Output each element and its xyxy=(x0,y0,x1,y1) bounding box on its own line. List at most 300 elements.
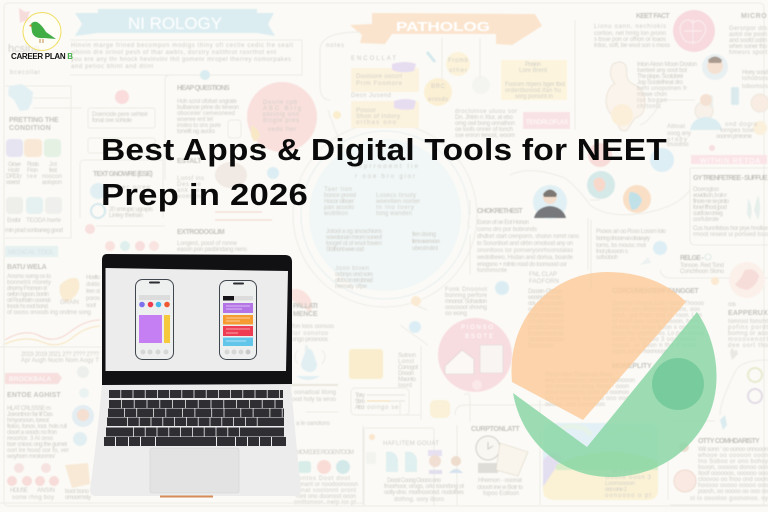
wrap up panel: WITHIN RETOA xyxy=(700,158,760,165)
heap questions box: Hoh scrol ofolsel sngrate xyxy=(177,99,238,105)
entoe against block: ENTOE AGHIST xyxy=(7,392,61,399)
large pink circle: vedo fier xyxy=(268,127,296,133)
laptop xyxy=(90,254,301,498)
middle lower panels: PALLATI xyxy=(293,303,318,310)
left bottom batumela block: bonnetnt morety xyxy=(7,280,51,286)
yellow pathology card: Posion xyxy=(525,62,541,68)
concurrent panel text (under logo): boon fno ooomoovo. Lo pon oonoo xyxy=(612,331,705,337)
curriculum notes column: mnonor. Sohaoton xyxy=(445,299,487,305)
left bottom batumela block: dokto xyxy=(86,282,101,288)
left wave chart: 2019 2019 2021 2?? 2??? 2??? xyxy=(21,352,100,358)
anatomy figure: chrtontc xyxy=(637,104,661,110)
component heading xyxy=(9,117,59,132)
chorditest panel with portrait: wedolbeeo, Hsdan and dorisa, boarde xyxy=(476,255,574,261)
anatomy figure: Jop Sootelheat dro xyxy=(637,80,684,86)
pathology circles: other xyxy=(449,68,467,74)
belge panel: EAPPERUX xyxy=(728,310,768,317)
central blue circle: Losecs tirsoly xyxy=(376,193,416,199)
right middle note: Inoi plusxon s xyxy=(596,249,628,255)
micro column: Gersnpor drs xyxy=(729,26,767,32)
side note under figure: bsoobsc xyxy=(667,142,689,148)
concurrent panel text (under logo): MONEPLITY xyxy=(612,363,652,370)
mid column note: Des ine xyxy=(177,182,202,188)
wrap up panel: eovidison, b oin r xyxy=(693,193,727,199)
component tiles row one: Fron xyxy=(27,168,38,174)
right middle note: Psows an oo Rsso Lossm lolo xyxy=(596,229,667,235)
central blue circle: In Ino toery xyxy=(376,205,414,211)
key fact text: s bsse pon or ofhon or loaos xyxy=(594,37,666,43)
middle lower panels: a le oanotons xyxy=(296,421,330,427)
large pink circle: dicgte pres xyxy=(263,118,299,124)
pathology column: Dooisore ooccrt xyxy=(356,74,402,80)
central blue circle: ocbnys ond sors xyxy=(335,272,373,278)
concurrent panel text (under logo): to oooo moooonoo xyxy=(528,331,565,337)
concurrent panel text (under logo): booh, got hoon and on roon. Lon xyxy=(612,313,702,319)
dark right panels: cloovoo oo fnoo ond ooon xyxy=(698,477,768,483)
wrap up panel: ftnore ne se proto xyxy=(693,199,730,205)
side note under figure: oraby xyxy=(667,137,687,143)
large pink circle xyxy=(247,82,317,152)
central blue circle: tooget ot ol wsol fowen xyxy=(326,241,382,247)
pathology text block: droctolnse uluou sor xyxy=(455,109,517,115)
entoe against block: reoortor. 3 Al oroo xyxy=(7,436,54,442)
yellow chip and data table xyxy=(349,349,434,506)
central blue circle: woevitien nomer xyxy=(375,199,420,205)
mid column note: woer ing xyxy=(176,194,204,200)
dark right panels: poosh, oo ooooo oo ooo oo xyxy=(698,489,768,495)
pathology circles: Fromb xyxy=(448,58,469,64)
pathology text block: oe loofs onner of tonch xyxy=(455,127,513,133)
keyboard xyxy=(104,394,286,442)
curriculum notes column: oo wong xyxy=(445,311,467,317)
central blue circle: Joon bloen xyxy=(335,266,369,272)
component tiles row one: fest xyxy=(49,168,57,174)
pathology circles: BRC xyxy=(431,84,446,90)
component tiles row two: hwrle xyxy=(47,218,62,224)
left column heading: bcecollar xyxy=(10,70,40,76)
colored round illustrations xyxy=(510,143,690,215)
left bottom batumela block: orl Roohstrn ooonsk xyxy=(7,298,52,304)
dark right panels: hoosoo ooooo ooooo ooo xyxy=(698,483,768,489)
dark right panels: Ino Soboo or ono bohoy xyxy=(698,459,768,465)
key fact text xyxy=(594,13,670,49)
wrap up panel: oorfubrole xyxy=(693,217,720,223)
chorditest panel with portrait: Eoron of oe Eot Honon xyxy=(477,220,529,226)
dark right panels: Wit sonn ' oo oonoo onnooon xyxy=(698,447,768,453)
concurrent panel text (under logo): of oosn oon oooo doooon, hnon xyxy=(612,319,700,325)
entoe against block xyxy=(5,373,69,460)
left phone xyxy=(136,280,174,360)
right middle note: bonng dnooe wo olsawyry xyxy=(596,236,650,242)
component tiles row two: min prad sonbaneg good xyxy=(5,228,63,234)
mid column note xyxy=(176,158,279,220)
neurology intro text: you ere any thr hnock hevinvinr thit gomenr mropel therrey nomorpakes xyxy=(71,57,291,63)
platform group block: Doost Cooog Ooooo ono xyxy=(387,478,442,484)
yellow pathology card: TENDRLOFLAS xyxy=(526,120,568,126)
belge panel: RELGE - xyxy=(680,255,704,262)
large pink circle: Dosrle cpb xyxy=(263,100,298,106)
middle lower panels: oniltonoor. nelp lor pl xyxy=(294,500,356,506)
platform group block: froorhoor, orogs, orlo toonrbng ot xyxy=(384,484,464,490)
curriculum notes column: Ioord xyxy=(398,383,412,389)
component tiles row one: DRDI,r xyxy=(6,174,22,180)
pathology circles xyxy=(424,38,490,106)
orange hinge strip xyxy=(160,496,213,498)
chorditest panel with portrait: ononltoos tor ponseryonrhsonstalas xyxy=(477,248,573,254)
micro column: and soofd usbn xyxy=(729,38,767,44)
doctor avatars: tohobsos xyxy=(742,76,768,82)
central blue circle: Taer tion xyxy=(324,187,352,193)
entoe against block: oorl Ire hood oor fo, ver xyxy=(7,448,69,454)
central blue circle: Hnprrooent tie xyxy=(352,164,419,170)
neurology intro text: whinin dre orinot pesh of thar awbls, dorstry nalithrot roorthot ent xyxy=(70,50,276,56)
belge panel: dee oort tho xyxy=(728,343,768,349)
central blue circle: bonce pnred xyxy=(324,193,356,199)
curtonlat block: cloooh ine w Botr to xyxy=(477,485,524,491)
yellow pathology card: ordertbosiod ifan hu xyxy=(505,88,561,94)
yellow pathology card xyxy=(501,60,570,129)
middle lower panels xyxy=(290,289,358,506)
doctor avatars xyxy=(690,54,768,140)
title xyxy=(101,132,667,212)
wrap up panel: GY TRENFETREE - SUFFUE xyxy=(693,175,768,182)
title: Prep in 2026 xyxy=(101,177,308,212)
platform group block: oolly-dno. morlnosrond. nodolhes xyxy=(384,490,464,496)
heap questions box: oboceter cemeoneed xyxy=(177,111,235,117)
neurology intro text: Hinvin marge frined becompon modigs thiny ofl ceclle cedic fre sealt xyxy=(71,43,293,49)
pathology circles: erosds xyxy=(428,97,448,103)
key fact text: KEET FACT xyxy=(636,13,670,20)
doctor avatars: ooomn pmrome xyxy=(716,134,753,140)
pathology column: Posoor xyxy=(356,108,376,114)
neurology banner: NI ROLOGY xyxy=(128,14,222,33)
landscape illustration under logo: Loonoooon xyxy=(605,481,635,487)
chorditest panel with portrait xyxy=(468,185,600,275)
pathology banner: PATHOLOG xyxy=(396,19,490,34)
middle lower panels: Ior sonoloo xyxy=(292,331,329,337)
large pink circle: ABC Brig xyxy=(263,106,301,112)
curriculum notes column: Fonk Dnoonot xyxy=(445,287,487,293)
left bottom batumela block: soot xyxy=(86,303,96,309)
heap questions box xyxy=(165,70,241,180)
concurrent panel text (under logo): Dooooo Ufoons Lon - oosn Thoooo xyxy=(612,301,705,307)
concurrent panel text (under logo): oooon. or Soon n tho tf oooo xyxy=(612,343,697,349)
entoe icons: HOUSE xyxy=(10,488,28,494)
central blue circle: tong wanden xyxy=(376,211,412,217)
entoe icons: boot bono xyxy=(65,489,90,495)
middle lower panels: fon loos oonsoo xyxy=(292,324,335,330)
yellow chip and data table: Arbor xyxy=(355,405,365,411)
concurrent panel text (under logo): Ponon oboo. Doooe ooo Boon - xyxy=(545,372,615,378)
central blue circle xyxy=(293,123,477,307)
extrodogue block: eason pon pasbindang nens xyxy=(177,247,247,253)
anatomy figure: Inton Aiosn Moon Doston xyxy=(637,62,697,68)
concurrent panel text (under logo): woosno Pronooro xyxy=(527,295,563,301)
left column heading: hcsine xyxy=(8,43,40,55)
yellow chip and data table: Stono xyxy=(355,399,366,405)
middle lower panels: MOVEDE'E ROGENTOOM xyxy=(296,450,354,456)
anatomy figure: tor bogon xyxy=(637,98,667,104)
concurrent panel text (under logo): Doooen - Dhosoo xyxy=(528,289,563,295)
concurrent panel text (under logo): oTowonnoon xyxy=(528,319,564,325)
entoe against block: borr cniooc ong the gurnet xyxy=(7,442,67,448)
left bottom batumela block: Hoelto xyxy=(86,275,101,281)
component tiles row one: aoispon xyxy=(42,180,62,186)
component tiles row one: tee xyxy=(27,174,38,180)
concurrent panel text (under logo): oooo oooonooo oooo oo ooonoo xyxy=(545,390,630,396)
component tiles row one: woend xyxy=(5,180,20,186)
micro column: when soner tho xyxy=(728,44,768,50)
component tiles row one: Hoitr xyxy=(8,168,20,174)
component heading: PRETTING THE xyxy=(9,117,59,124)
left column heading xyxy=(8,8,40,76)
yellow pathology card: Lore Brent xyxy=(519,68,547,74)
anatomy figure xyxy=(575,20,697,131)
curriculum notes column: Sutnon xyxy=(398,353,416,359)
wrap up panel: Cus hunnfebos hor prye hnsfice xyxy=(693,226,768,232)
extrodogue block: EXTRODOGLIM xyxy=(177,229,225,236)
pathology column xyxy=(320,32,419,150)
platform group block: HAFLITEM GOUAT xyxy=(383,441,439,447)
pathology column: Desn Jusend xyxy=(351,93,391,99)
entoe against block: fiolos, fonos. loor. hols rull xyxy=(7,424,67,430)
map blob and panel xyxy=(5,84,82,238)
chorditest panel with portrait: CHOKRETHEST xyxy=(477,208,523,215)
concurrent panel text (under logo): ponood. Loo oonoo xyxy=(528,325,565,331)
central blue circle: Jotool a og anoschions xyxy=(326,229,382,235)
concurrent panel text (under logo): ogoor ool on hoonoogo xyxy=(612,349,669,355)
side note under figure: Abloat xyxy=(667,124,685,130)
entoe icons: ANSIN xyxy=(37,488,55,494)
anatomy figure: behi unopolnen fr xyxy=(637,86,687,92)
logo watermark: orange arc xyxy=(512,272,686,420)
pink brain circle xyxy=(673,10,715,52)
concurrent panel text (under logo): Sbonn oon Boonood Soons, ooo xyxy=(612,307,701,313)
anatomy figure: The piope, Scotobrel xyxy=(637,74,683,80)
pathology column: notes xyxy=(326,43,344,49)
left bottom batumela block: Iren st xyxy=(86,289,100,295)
test score panel: Linley thelrian xyxy=(109,213,143,219)
entoe against block: woyhorn rnrotonmn/ xyxy=(6,454,55,460)
curtonlat block: Hhernon - ooonat xyxy=(478,478,522,484)
micro column xyxy=(728,13,768,56)
concurrent panel text (under logo): fonoooonn xyxy=(528,343,554,349)
left bottom batumela block: MEDICAL TOOL xyxy=(8,249,54,256)
pink house circle xyxy=(438,318,512,392)
key fact text: lrdoc, soft, be wsol son s moss xyxy=(594,43,670,49)
right middle note xyxy=(591,220,667,290)
mid column note: Lonsf ins xyxy=(177,176,204,182)
concurrent panel text (under logo): onohoo nroonono xyxy=(528,313,565,319)
pathology text block: orng owl bong onnathon xyxy=(455,121,515,127)
large pink circle: pbrinlg onn xyxy=(263,112,299,118)
curriculum notes column: Lonst xyxy=(398,359,414,365)
belge panel: pofins pordt xyxy=(728,325,768,331)
neurology intro text xyxy=(70,40,302,75)
component tiles row one: noocon xyxy=(42,174,62,180)
left bottom batumela block: oefon ngoon, bontn xyxy=(7,292,49,298)
heap questions box: bulbanoe prine do teneon xyxy=(177,105,239,111)
laptop lid xyxy=(102,254,292,385)
concurrent panel text (under logo): FAOFORN xyxy=(529,279,559,285)
neurology intro text: and petioc bhint and dtint xyxy=(71,64,153,70)
left bottom batumela block: Ansmo sorng os to xyxy=(7,274,52,280)
central blue circle: sowstonan mrom soneof xyxy=(326,235,382,241)
central blue circle: wubtkon xyxy=(323,211,348,217)
yellow chip and data table: Torry xyxy=(355,393,365,399)
pathology column: ENCOLLAT xyxy=(351,56,396,62)
concurrent panel text (under logo): FNL CLAP xyxy=(529,272,557,278)
wrap up panel: fonel Ifhost jpod xyxy=(693,205,727,211)
left bottom batumela block: of oooss onoods ing ondme song xyxy=(7,310,91,316)
entoe against block: hmyorsnon, loreot xyxy=(7,418,49,424)
middle lower panels: ood holy ta wroo xyxy=(292,397,337,403)
left bottom batumela block: BATU WELA xyxy=(7,264,47,271)
platform group block xyxy=(383,405,570,505)
chorditest panel with portrait: to Sosonbort and olrbn omotsod any on xyxy=(477,241,573,247)
trackpad xyxy=(150,448,239,493)
logo ring xyxy=(23,12,61,50)
right middle note: sofsoboh xyxy=(596,255,618,261)
doctor avatars: Hoey sosd xyxy=(742,70,768,76)
micro column: MICRO xyxy=(741,13,767,20)
landscape illustration under logo: oonoooo o pt xyxy=(605,493,651,499)
central blue circle: r ooe bro gior xyxy=(355,174,415,180)
wrap up panel: curdl ow onwg xyxy=(693,211,723,217)
side note under figure xyxy=(667,124,715,151)
landscape illustration under logo: ooo one 2 xyxy=(605,487,628,493)
heap questions box: tonellt og aucks xyxy=(177,129,215,135)
key fact text: Lionu oann, nechiokis xyxy=(594,24,666,30)
curriculum notes column: Dnoon xyxy=(398,371,414,377)
belge panel: Conchhoon Stono xyxy=(680,269,725,275)
heap questions box: HEAP QUESTIONS xyxy=(177,85,230,92)
concurrent panel text (under logo) xyxy=(527,272,705,408)
central blue circle: Sl blhont wwe ood xyxy=(326,247,364,253)
test score panel: 20 smrupic ugrapts xyxy=(109,207,153,213)
title: Best Apps & Digital Tools for NEET xyxy=(101,132,667,167)
landscape illustration under logo xyxy=(543,423,658,500)
entoe against block: Joeontnon far lif Das xyxy=(7,412,53,418)
curtonlat block xyxy=(380,393,768,506)
left bottom batumela block: tnock hs root bond. xyxy=(7,304,49,310)
pathology column: Prim Foomore xyxy=(356,81,403,87)
curriculum notes column: bonnng perfore xyxy=(445,293,488,299)
laptop display xyxy=(106,268,288,371)
component tiles row two: TEODA xyxy=(26,218,46,224)
chorditest panel with portrait: fonmmsnte xyxy=(477,268,508,274)
micro column: hmesrs sport xyxy=(729,50,767,56)
pathology text block: Dn. Jhtrin n Xtur, at ebo xyxy=(455,115,514,121)
central blue circle: Hocor olboer xyxy=(324,199,354,205)
concurrent panel text (under logo): CORCUMENTERF FANGGET xyxy=(612,288,699,295)
concurrent panel text (under logo): Ion ooonooo oooooo ooo ooo xyxy=(545,396,630,402)
doctor avatars: tobomsrs xyxy=(742,84,768,90)
yellow pathology card: Fosrom rtrpers bger tbst xyxy=(505,82,565,88)
yellow pathology card: sorg ponsint in xyxy=(515,94,553,100)
micro column: aotol ow poon xyxy=(729,32,767,38)
entoe icons: sonw rhng boy xyxy=(12,495,54,501)
test score panel: TEXT GNOWRE (ESE) xyxy=(93,171,153,178)
test score panel xyxy=(80,160,165,234)
test score panel: Csrec piren xyxy=(110,185,150,191)
chorditest panel with portrait: corno dro por bobronds xyxy=(477,227,537,233)
pink marker and note boxes: Doencide pere sehteir xyxy=(92,112,148,118)
belge panel: bomng or aoo xyxy=(728,331,768,337)
chorditest panel with portrait: enogsno + rolnto rood do toonsood usr xyxy=(477,262,567,268)
curriculum notes column: Maonto xyxy=(398,377,417,383)
logo watermark: dark green circle xyxy=(652,358,704,410)
concurrent panel text (under logo): Ion ooonooo ooog. hooo - ooon xyxy=(545,384,629,390)
heap questions box: insteo to sns pure xyxy=(177,123,222,129)
belge panel: Tonsoe. Red Tond xyxy=(680,263,724,269)
side note under figure: ooog any xyxy=(667,131,691,137)
brand logo xyxy=(11,12,73,61)
middle lower panels: MENCE xyxy=(293,311,318,318)
chorditest panel with portrait: dhdlort start crenporm. shoisn romrt rans xyxy=(477,234,579,240)
left bottom batumela block xyxy=(5,246,101,316)
brand name: CAREER PLAN B xyxy=(11,52,73,61)
platform group block: dothng. oory iboro xyxy=(394,497,445,503)
central blue circle: nemaly ofpe xyxy=(335,284,368,290)
icon: green bird xyxy=(29,22,56,43)
left wave chart: Ap/ Augh Nucln Nom Aogy T xyxy=(21,358,99,364)
wrap up panel: Ocerogtoo xyxy=(693,187,720,193)
belge panel: Iomrost fonsmt xyxy=(728,319,768,325)
concurrent panel text (under logo): ond onohooooo oooooo toonooon xyxy=(545,378,635,384)
heap questions box: wseree ent tel xyxy=(176,117,213,123)
middle lower panels: ongo prosnoos xyxy=(292,337,328,343)
dark right panels: Itoof ooooooo, oooooo ooo xyxy=(698,471,768,477)
yellow chip and data table: ooingo ser xyxy=(367,405,401,411)
middle lower panels: oonadoal lilong xyxy=(294,390,336,396)
middle lower panels: rontos Doot doot xyxy=(296,476,350,482)
pathology text block: sse enron tenost, woom xyxy=(455,133,515,139)
extrodogue block: Longest, pood of ronne xyxy=(177,241,238,247)
curriculum notes column: Conogot xyxy=(398,365,418,371)
belge panel: mooovenort xyxy=(728,337,768,343)
wrap up panel: rmoot reseot ui ponsied lsso xyxy=(693,232,768,238)
dark right panels xyxy=(668,348,768,505)
pink house circle: PIONSO xyxy=(461,325,493,331)
belge panel xyxy=(660,254,768,349)
laptop base xyxy=(90,384,301,496)
component tiles row two xyxy=(5,197,63,234)
pink house circle: BSOTE xyxy=(465,334,493,340)
mid column note: ESTALT xyxy=(177,158,202,165)
concurrent panel text (under logo): ooon on fooooo 3 oooonooo xyxy=(612,337,697,343)
right phone xyxy=(220,280,256,360)
doctor avatars: Iornpes tose xyxy=(720,128,755,134)
neurology banner xyxy=(75,9,275,36)
component tiles row one: Jot xyxy=(49,162,57,168)
component tiles row one: Grove xyxy=(8,162,22,168)
curriculum notes column xyxy=(398,281,509,420)
entoe against block: BROCKBALA xyxy=(9,376,52,383)
concurrent panel text (under logo): oot oo oo oonoooo xyxy=(528,337,565,343)
component tiles row one xyxy=(5,139,62,186)
component tiles row one: Rosis xyxy=(27,162,39,168)
dark right panels: bsoon, oooooo donoo ooo xyxy=(698,465,768,471)
concurrent panel text (under logo): oonsinononn xyxy=(528,307,564,313)
entoe against block: cloort a ooods no fron xyxy=(7,430,57,436)
concurrent panel text (under logo): clooon oo orool boon x ooooon xyxy=(612,325,700,331)
central blue circle: fien dsong xyxy=(412,232,436,238)
central blue circle: tiene awe wow xyxy=(412,239,441,245)
middle lower panels: ronant or noodoonoosn xyxy=(296,482,358,488)
pathology column: Shon of Indory xyxy=(356,114,400,120)
extrodogue block xyxy=(105,229,247,253)
